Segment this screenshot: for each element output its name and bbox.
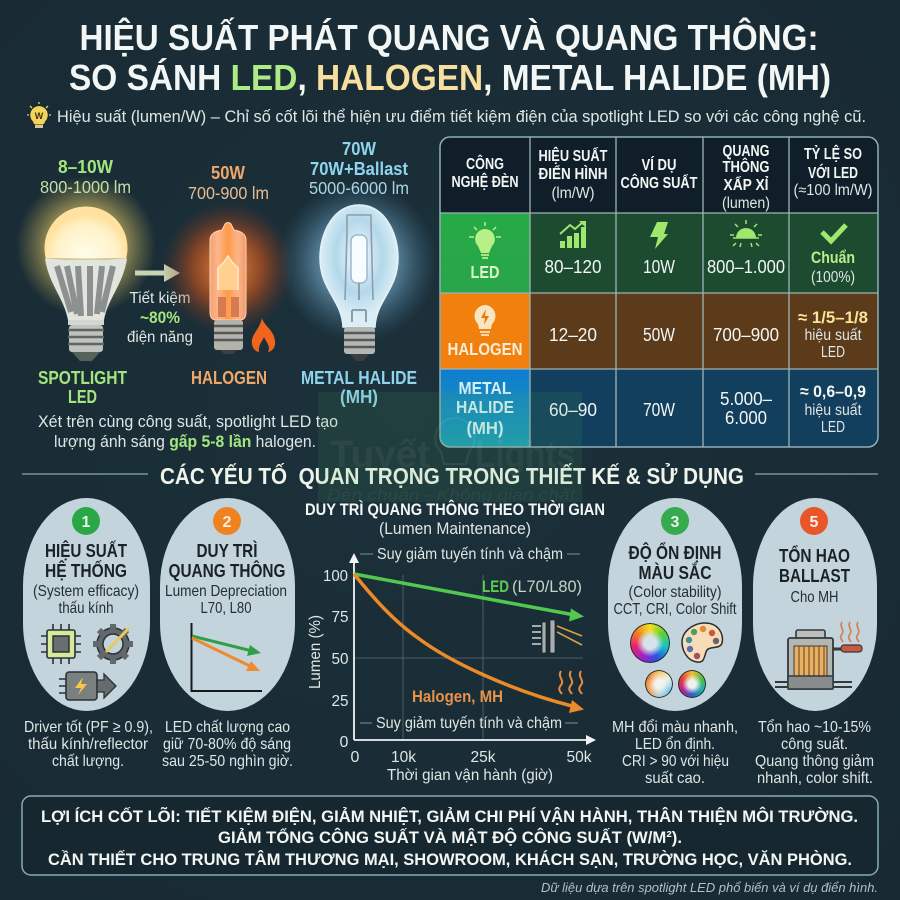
row: halogen: 700–900 [713, 324, 779, 345]
note 5: Tổn hao ~10-15% [758, 718, 871, 736]
badge 2: 2 [223, 514, 232, 531]
panel: 1 system efficacy [23, 498, 150, 711]
icon: gear [93, 624, 133, 664]
panel: 5 ballast loss [753, 498, 877, 711]
icon: growth chart [560, 221, 586, 248]
title: SO SÁNH LED, HALOGEN, METAL HALIDE (MH) [69, 57, 831, 98]
note 5: công suất. [781, 736, 848, 753]
wattage: metal halide: 70W [342, 139, 376, 159]
panel: comparison table [440, 137, 878, 447]
table header [452, 143, 872, 212]
heading: CCT, CRI, Color Shift [614, 601, 737, 618]
wattage: LED: 8–10W [58, 157, 113, 177]
axes [349, 553, 596, 745]
icon: efficacy bulb [27, 102, 51, 128]
comparison note: lượng ánh sáng gấp 5-8 lần halogen. [54, 433, 316, 451]
panel: 2 lumen depreciation [160, 498, 295, 711]
icon: ballast [775, 622, 862, 689]
table header: ĐIỂN HÌNH [538, 165, 608, 183]
x axis labels: 0 [351, 749, 360, 766]
icon: heat sink [532, 620, 582, 653]
heading [33, 540, 139, 617]
heading: DUY TRÌ [196, 540, 258, 561]
grid [354, 575, 583, 740]
note 3: suất cao. [645, 770, 705, 787]
watermark: Lights [475, 434, 575, 476]
spotlight LED bulb [16, 176, 156, 361]
row: LED: 800–1.000 [707, 256, 785, 277]
row: halogen: LED [821, 344, 845, 361]
row: LED: LED [470, 262, 500, 282]
y axis labels: 50 [332, 651, 349, 668]
heading: (System efficacy) [33, 583, 139, 600]
table header: (lumen) [722, 195, 770, 212]
note 2: sau 25-50 nghìn giờ. [162, 753, 293, 770]
row: metal halide: 70W [643, 399, 675, 420]
heading: HIỆU SUẤT [45, 540, 128, 561]
heading: ĐỘ ỔN ĐỊNH [628, 542, 722, 563]
heading: MÀU SẮC [638, 562, 712, 583]
row: halogen: ≈ 1/5–1/8 [798, 308, 868, 327]
row: metal halide: 6.000 [725, 407, 767, 428]
y axis labels: 100 [323, 568, 348, 585]
row: LED: 10W [643, 256, 675, 277]
arrow: LED to halogen [135, 264, 180, 282]
note 3: MH đổi màu nhanh, [612, 718, 738, 736]
heading: TỔN HAO [779, 545, 850, 566]
badge 3: 3 [671, 514, 680, 531]
icon: bolt [650, 222, 668, 249]
row: metal halide: hiệu suất [804, 402, 862, 419]
row: metal halide: ≈ 0,6–0,9 [800, 382, 866, 401]
row: metal halide: 60–90 [549, 399, 597, 420]
badge 1: 1 [82, 514, 91, 531]
row: LED: (100%) [811, 269, 855, 286]
icon: warm color wheel [644, 669, 674, 699]
badge 1 [72, 507, 100, 535]
y axis labels: 25 [332, 693, 349, 710]
table header: (≈100 lm/W) [794, 182, 872, 199]
note 2: giữ 70-80% độ sáng [163, 736, 291, 753]
watermark [318, 392, 582, 504]
wattage: metal halide: 70W+Ballast [310, 159, 408, 179]
note 1 [24, 719, 153, 770]
icon: cool color wheel [677, 669, 707, 699]
comparison note: Xét trên cùng công suất, spotlight LED tạo [38, 413, 338, 431]
LED line: (L70/L80) [512, 578, 582, 596]
watermark: Đèn chuẩn - Không gian chất [327, 486, 576, 504]
row: halogen [448, 305, 868, 361]
wattage: LED [40, 157, 131, 197]
mini chart [192, 623, 262, 691]
heading: L70, L80 [200, 600, 252, 617]
note 3: CRI > 90 với hiệu [622, 753, 729, 770]
row: halogen: 12–20 [549, 324, 597, 345]
table header: XẤP XỈ [724, 177, 769, 194]
icon: LED bulb [469, 222, 501, 258]
LED line [354, 574, 584, 622]
table header: VỚI LED [808, 164, 858, 182]
section heading: CÁC YẾU TỐ QUAN TRỌNG TRONG THIẾT KẾ & SỬ DỤNG [160, 461, 744, 489]
x axis labels: 50k [566, 749, 592, 766]
note 1: chất lượng. [52, 753, 124, 770]
icon: halogen bulb [475, 305, 495, 335]
row: LED: Chuẩn [811, 249, 855, 267]
comparison note [38, 413, 338, 451]
row: LED [469, 220, 855, 286]
row: metal halide [456, 378, 866, 438]
line chart: lumen maintenance [307, 546, 596, 784]
callout: core benefits: CẦN THIẾT CHO TRUNG TÂM THƯƠNG MẠI, SHOWROOM, KHÁCH SẠN, TRƯỜNG HỌC, VĂN PHÒNG. [48, 850, 852, 869]
x axis labels: 10k [391, 749, 417, 766]
wattage: halogen: 50W [211, 163, 245, 183]
callout: core benefits [22, 796, 878, 875]
title: HIỆU SUẤT PHÁT QUANG VÀ QUANG THÔNG: [80, 16, 818, 58]
halogen line: Halogen, MH [412, 688, 503, 706]
table header: VÍ DỤ [642, 157, 676, 174]
badge 3 [661, 507, 689, 535]
subtitle: Hiệu suất (lumen/W) – Chỉ số cốt lõi thể hiện ưu điểm tiết kiệm điện của spotlight LED so với các công nghệ cũ. [57, 108, 866, 126]
icon: chip [41, 624, 81, 664]
heading: QUANG THÔNG [168, 560, 286, 581]
title [69, 16, 831, 98]
y axis labels: Lumen (%) [307, 615, 324, 689]
lamp names: SPOTLIGHT [38, 368, 127, 388]
wattage: halogen [188, 163, 269, 203]
icon: driver [59, 672, 116, 700]
lamp names: (MH) [340, 387, 378, 407]
heading: thấu kính [58, 600, 114, 617]
row: halogen: HALOGEN [448, 339, 522, 359]
wattage: metal halide: 5000-6000 lm [309, 178, 409, 198]
table header: HIỆU SUẤT [538, 147, 608, 165]
note 5 [755, 718, 874, 787]
y axis labels: 75 [332, 609, 349, 626]
icon: heat waves [559, 671, 582, 694]
row: metal halide: 5.000– [720, 388, 773, 409]
heading: Cho MH [790, 589, 838, 606]
note 1: thấu kính/reflector [28, 736, 149, 753]
note 2 [162, 719, 293, 770]
table header: THÔNG [722, 158, 770, 176]
icon: efficacy bulb: W [35, 111, 44, 121]
chart title [305, 500, 605, 538]
note 2: LED chất lượng cao [165, 719, 290, 736]
callout: core benefits: LỢI ÍCH CỐT LÕI: TIẾT KIỆM ĐIỆN, GIẢM NHIỆT, GIẢM CHI PHÍ VẬN HÀNH, THÂN THIỆN MÔI TRƯỜNG. [41, 806, 858, 826]
footnote: Dữ liệu dựa trên spotlight LED phổ biến và ví dụ điển hình. [541, 880, 878, 895]
table header: (lm/W) [552, 185, 594, 202]
row: halogen: hiệu suất [804, 327, 862, 344]
badge 5 [800, 507, 828, 535]
badge 2 [213, 507, 241, 535]
wattage: halogen: 700-900 lm [188, 183, 269, 203]
note 1: Driver tốt (PF ≥ 0.9), [24, 719, 153, 736]
halogen line [354, 574, 584, 713]
icon: palette [682, 623, 722, 662]
annotation top: Suy giảm tuyến tính và chậm [377, 546, 563, 563]
x axis labels: Thời gian vận hành (giờ) [387, 767, 553, 784]
lamp names: HALOGEN [191, 368, 267, 388]
row: metal halide: LED [821, 419, 845, 436]
saving note [127, 290, 193, 346]
saving note: Tiết kiệm [130, 290, 190, 307]
table header: TỶ LỆ SO [804, 145, 862, 163]
metal halide lamp [278, 182, 438, 361]
table header: CÔNG [466, 155, 504, 173]
wattage: metal halide [309, 139, 409, 198]
lamp names: METAL HALIDE [301, 368, 417, 388]
chart title: DUY TRÌ QUANG THÔNG THEO THỜI GIAN [305, 500, 605, 519]
icon: check [822, 225, 846, 241]
note 5: Quang thông giảm [755, 753, 874, 770]
note 3: LED ổn định. [635, 735, 715, 753]
heading: Lumen Depreciation [165, 583, 287, 600]
lamp names: LED [68, 387, 97, 407]
icon: flame [252, 318, 275, 352]
y axis labels: 0 [340, 734, 349, 751]
note 5: nhanh, color shift. [757, 770, 873, 787]
halogen lamp [162, 202, 294, 354]
panel: 3 color stability [608, 498, 742, 711]
y axis labels [307, 568, 349, 751]
icon: light output [730, 220, 762, 247]
chart title: (Lumen Maintenance) [379, 520, 531, 538]
row: metal halide: METAL [458, 378, 512, 398]
x axis labels [351, 749, 592, 784]
icon: color wheel large [629, 622, 671, 664]
panel: lamp comparison [16, 139, 438, 451]
LED line: LED [482, 578, 509, 596]
wattage: LED: 800-1000 lm [40, 177, 131, 197]
heading: HỆ THỐNG [45, 560, 127, 581]
heading [779, 545, 851, 606]
row: metal halide: HALIDE [456, 397, 514, 417]
row: metal halide: (MH) [466, 418, 504, 438]
lamp names [38, 368, 417, 407]
table cell fills [440, 137, 878, 447]
table header: NGHỆ ĐÈN [452, 173, 518, 191]
row: LED: 80–120 [544, 256, 602, 277]
table header: CÔNG SUẤT [620, 174, 698, 192]
heading: (Color stability) [628, 584, 722, 601]
annotation bottom: Suy giảm tuyến tính và chậm [376, 715, 562, 732]
badge 5: 5 [810, 514, 819, 531]
callout: core benefits: GIẢM TỔNG CÔNG SUẤT VÀ MẬT ĐỘ CÔNG SUẤT (W/M²). [218, 828, 682, 847]
watermark: Tuyết [330, 434, 430, 476]
heading [614, 542, 737, 618]
table header: QUANG [722, 143, 770, 160]
saving note: điện năng [127, 329, 193, 346]
note 3 [612, 718, 738, 787]
row: halogen: 50W [643, 324, 675, 345]
heading: BALLAST [779, 565, 851, 586]
heading [165, 540, 287, 617]
x axis labels: 25k [470, 749, 496, 766]
saving note: ~80% [140, 308, 180, 327]
